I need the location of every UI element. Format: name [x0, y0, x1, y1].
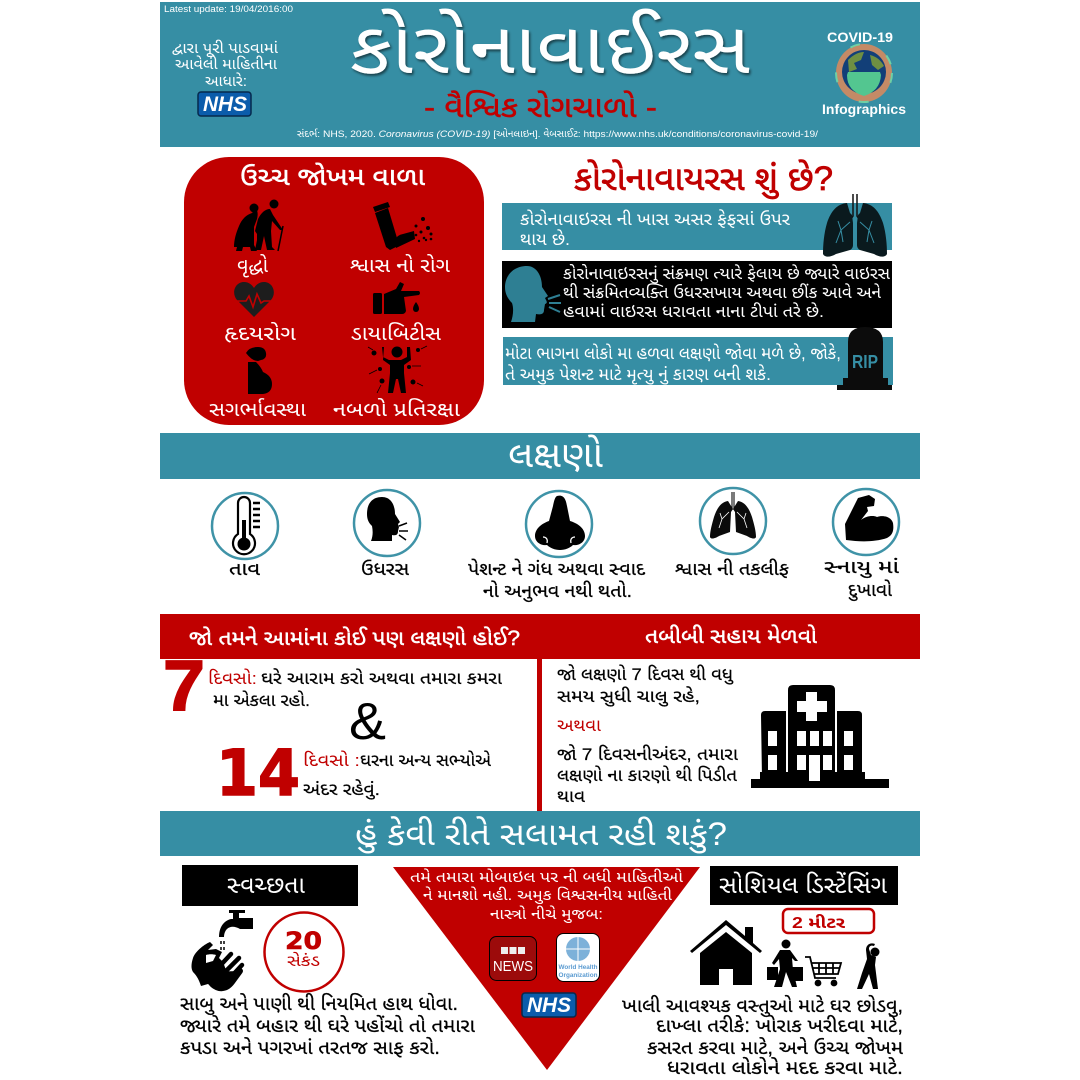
icon: WHO: [556, 934, 600, 982]
panel: trusted sources triangle: નાસ્ત્રો નીચે મુજબ:: [490, 906, 603, 924]
symptom: muscle pain: સ્નાયુ માં: [824, 557, 899, 579]
red band: if you have symptoms / seek medical help: જો તમને આમાંના કોઈ પણ લક્ષણો હોઈ?: [189, 625, 520, 650]
number: 7 days: 7: [163, 647, 205, 726]
panel: transmission info: કોરોનાવાઇરસનું સંક્રમણ ત્યારે ફેલાય છે જ્યારે વાઇરસ: [563, 263, 890, 284]
social distancing text: કસરત કરવા માટે, અને ઉચ્ચ જોખમ: [647, 1035, 904, 1059]
panel: medical help guidance: અથવા: [557, 716, 602, 735]
icon: shopping cart: [805, 957, 841, 986]
section band: symptoms: લક્ષણો: [508, 434, 603, 475]
icon: NHS logo: NHS: [527, 994, 571, 1017]
panel: medical help guidance: લક્ષણો ના કારણો થી પિડીત: [557, 765, 737, 785]
social distancing text: [622, 993, 904, 1079]
panel: trusted sources triangle: ને માનશો નહી. અમુક વિશ્વસનીય માહિતી: [423, 886, 672, 905]
heading: social distancing: [710, 866, 898, 905]
panel: isolation guidance: મા એકલા રહો.: [213, 691, 310, 710]
callout: 20 seconds: [264, 912, 344, 992]
COVID-19 logo text: COVID-19: [827, 29, 893, 45]
icon: pregnant woman: [246, 347, 272, 394]
hygiene text: [180, 991, 475, 1059]
label: pregnancy: સગર્ભાવસ્થા: [209, 398, 307, 421]
panel: severity info: મોટા ભાગના લોકો મા હળવા લક્ષણો જોવા મળે છે, જોકે,: [505, 344, 841, 363]
callout: 2 metres: 2 મીટર: [792, 913, 845, 932]
icon: hospital: [751, 685, 889, 788]
label: diabetes: ડાયાબિટીસ: [351, 322, 442, 345]
panel: isolation guidance: દિવસો:: [208, 668, 257, 688]
reference line: સંદર્ભ: NHS, 2020. Coronavirus (COVID-19) [ઓનલાઇન]. વેબસાઈટ: https://www.nhs.uk/conditions/coronavirus-covid-19/: [297, 128, 818, 140]
heading: high risk: ઉચ્ચ જોખમ વાળા: [240, 162, 425, 191]
heading: social distancing: સોશિયલ ડિસ્ટેંસિંગ: [719, 871, 887, 899]
red band: if you have symptoms / seek medical help: [160, 614, 920, 659]
icon: lungs: [710, 492, 756, 539]
panel: medical help guidance: [557, 664, 889, 806]
icon: gravestone: [837, 327, 892, 390]
heading: what is coronavirus: કોરોનાવાયરસ શું છે?: [574, 158, 833, 199]
label: elderly: વૃદ્ધો: [237, 254, 269, 278]
callout: 20 seconds: સેકંડ: [287, 950, 320, 970]
callout: 2 metres: [783, 909, 874, 933]
icon: lungs: [823, 194, 887, 257]
panel: medical help guidance: જો 7 દિવસનીઅંદર, તમારા: [557, 744, 739, 764]
panel: transmission info: હવામાં વાઇરસ ધરાવતા નાના ટીપાં તરે છે.: [563, 301, 824, 321]
hygiene text: કપડા અને પગરખાં તરતજ સાફ કરો.: [180, 1035, 440, 1059]
label: respiratory disease: શ્વાસ નો રોગ: [350, 254, 450, 277]
section band: how can I stay safe: હું કેવી રીતે સલામત રહી શકું?: [355, 816, 727, 853]
social distancing text: ખાલી આવશ્યક વસ્તુઓ માટે ઘર છોડવુ,: [622, 993, 903, 1018]
icon: coughing head: [367, 497, 408, 541]
panel: isolation guidance: ઘરના અન્ય સભ્યોએ: [360, 751, 491, 770]
panel: isolation guidance: દિવસો :: [303, 750, 360, 770]
panel: social distancing: [622, 866, 904, 1079]
panel: trusted sources triangle: [393, 867, 700, 1070]
panel: severity info: [503, 327, 893, 390]
section band: symptoms: [160, 433, 920, 479]
ampersand: &: [349, 693, 386, 751]
symptom: fever: [212, 493, 278, 579]
number: 14 days: 14: [216, 737, 300, 810]
panel: high risk groups: [184, 157, 484, 425]
icon: tap and washing hands: [192, 910, 253, 988]
icon: BBC News: NEWS: [493, 958, 533, 975]
panel: trusted sources triangle: તમે તમારા મોબાઇલ પર ની બધી માહિતીઓ: [410, 868, 684, 886]
icon: finger blood drop: [373, 282, 420, 314]
icon: gravestone: RIP: [852, 352, 878, 372]
update timestamp: Latest update: 19/04/2016:00: [164, 4, 293, 14]
callout: 20 seconds: 20: [285, 927, 322, 955]
red band: if you have symptoms / seek medical help: તબીબી સહાય મેળવો: [645, 623, 817, 648]
source note: [172, 39, 278, 90]
icon: flexed arm: [845, 495, 893, 541]
icon: inhaler: [373, 202, 432, 250]
symptom: muscle pain: દુખાવો: [848, 580, 892, 602]
hygiene text: સાબુ અને પાણી થી નિયમિત હાથ ધોવા.: [180, 991, 458, 1016]
divider: [537, 659, 542, 812]
panel: transmission info: [502, 261, 892, 328]
panel: lungs info: કોરોનાવાઇરસ ની ખાસ અસર ફેફસાં ઉપર: [520, 210, 790, 229]
icon: elderly couple: [234, 200, 283, 251]
icon: NHS logo: NHS: [203, 93, 247, 116]
icon: globe with mask: [836, 44, 892, 102]
icon: exercising person: [857, 943, 880, 989]
label: heart disease: હૃદયરોગ: [224, 322, 296, 345]
panel: medical help guidance: જો લક્ષણો 7 દિવસ થી વધુ: [557, 664, 734, 685]
icon: WHO: World Health: [558, 964, 598, 971]
icon: heart with pulse: [234, 282, 275, 317]
subtitle: - વૈશ્વિક રોગચાળો -: [424, 90, 657, 124]
heading: hygiene: [182, 865, 358, 906]
hygiene text: જ્યારે તમે બહાર થી ઘરે પહોંચો તો તમારા: [180, 1013, 475, 1037]
section band: how can I stay safe: [160, 811, 920, 856]
panel: hygiene: [180, 865, 475, 1059]
panel: medical help guidance: થાવ: [557, 787, 585, 806]
symptom: loss of smell or taste: [468, 491, 646, 603]
symptom: cough: ઉધરસ: [361, 559, 409, 579]
social distancing text: દાખ્લા તરીકે: ખોરાક ખરીદવા માટે,: [656, 1013, 903, 1037]
symptom: cough: [354, 490, 420, 579]
title: કોરોનાવાઈરસ: [350, 8, 750, 89]
icon: weak immunity: [368, 346, 427, 393]
header panel: [160, 2, 920, 147]
label: weak immunity: નબળો પ્રતિરક્ષા: [333, 398, 461, 421]
panel: transmission info: થી સંક્રમિતવ્યક્તિ ઉધરસખાય અથવા છીંક આવે અને: [563, 282, 881, 302]
icon: shopper: [767, 940, 803, 987]
source note: આવેલી માહિતીના: [175, 55, 277, 73]
symptom: muscle pain: [824, 489, 899, 602]
icon: thermometer: [233, 497, 260, 554]
Infographics logo text: Infographics: [822, 101, 906, 117]
icon: house: [690, 920, 762, 985]
social distancing text: ધરાવતા લોકોને મદદ કરવા માટે.: [667, 1055, 903, 1079]
symptom: breathing difficulty: [675, 488, 789, 579]
icon: nose: [535, 496, 585, 550]
symptom: loss of smell or taste: પેશન્ટ ને ગંધ અથવા સ્વાદ: [468, 558, 646, 579]
icon: coughing head: [505, 266, 561, 322]
panel: severity info: તે અમુક પેશન્ટ માટે મૃત્યુ નું કારણ બની શકે.: [505, 365, 771, 385]
panel: isolation guidance: [163, 647, 503, 810]
source note: દ્વારા પૂરી પાડવામાં: [172, 39, 278, 58]
symptom: breathing difficulty: શ્વાસ ની તકલીફ: [675, 559, 789, 579]
icon: BBC News: [490, 936, 536, 980]
source note: આધારે:: [205, 73, 247, 90]
panel: isolation guidance: ઘરે આરામ કરો અથવા તમારા કમરા: [261, 669, 503, 688]
heading: hygiene: સ્વચ્છતા: [227, 872, 306, 899]
symptom: loss of smell or taste: નો અનુભવ નથી થતો.: [483, 581, 632, 603]
panel: isolation guidance: અંદર રહેવું.: [303, 780, 380, 800]
panel: medical help guidance: સમય સુધી ચાલુ રહે,: [557, 687, 700, 707]
panel: lungs info: થાય છે.: [520, 230, 570, 249]
icon: WHO: Organization: [558, 972, 598, 979]
symptom: fever: તાવ: [229, 559, 261, 579]
panel: lungs info: [502, 194, 892, 257]
